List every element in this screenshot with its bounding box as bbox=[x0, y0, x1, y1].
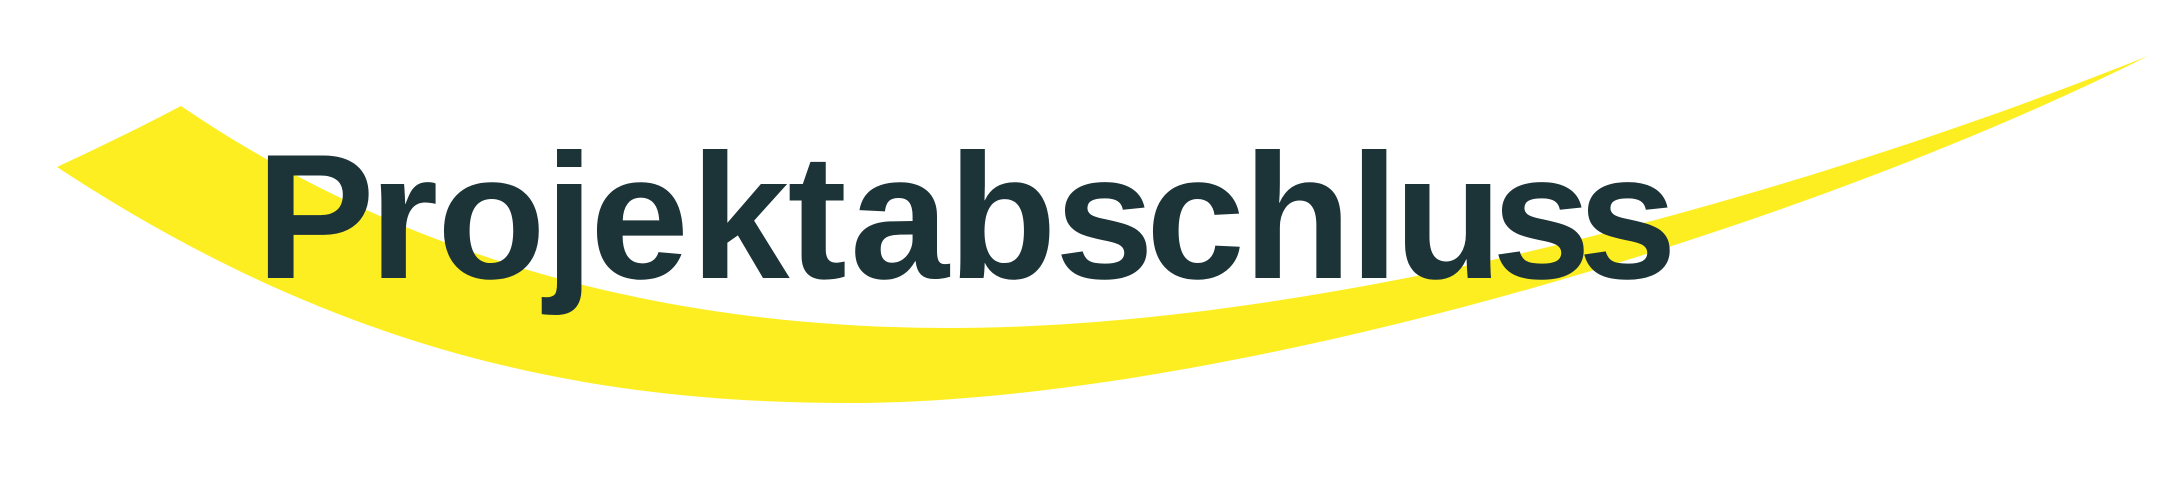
title: Projektabschluss bbox=[256, 117, 1677, 316]
yellow brush swoosh bbox=[57, 56, 2148, 403]
